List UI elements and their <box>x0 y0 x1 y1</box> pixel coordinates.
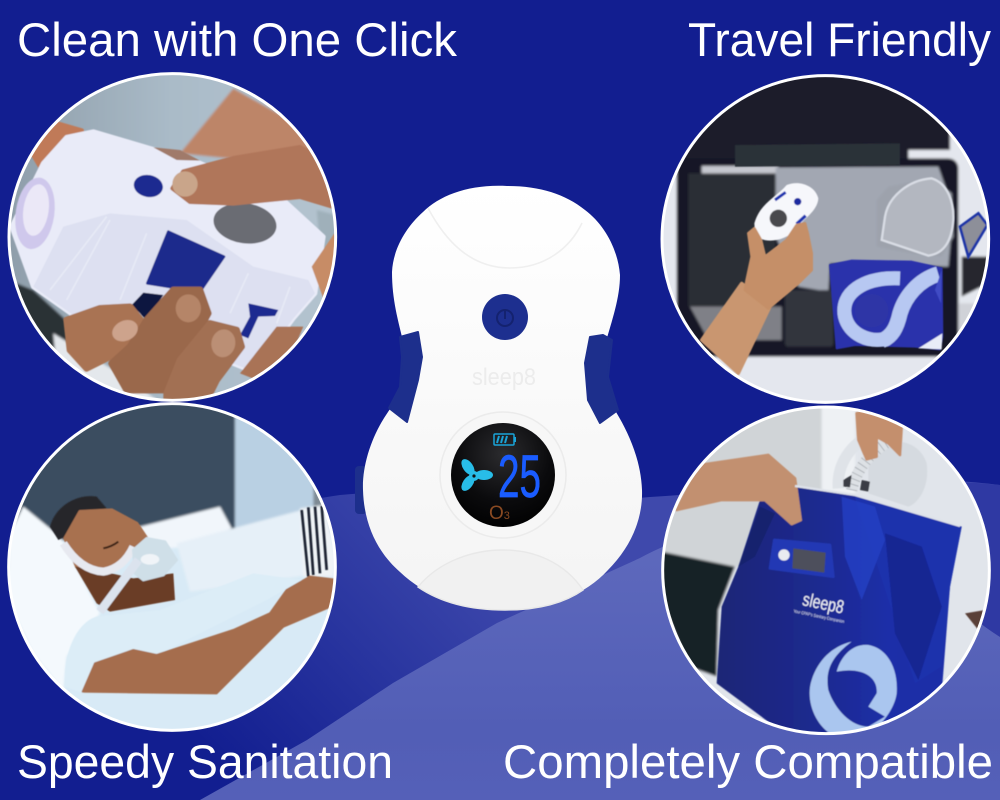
device: display <box>451 423 555 527</box>
device: sleep8 logo: sleep8 <box>472 364 536 391</box>
device: shell <box>363 186 642 610</box>
device: top cap seam <box>428 208 582 268</box>
timer reading: 25 <box>498 443 541 510</box>
icon: battery <box>494 434 516 445</box>
device: right grip <box>585 335 618 423</box>
device: left grip <box>389 332 422 422</box>
central device: sleep8 sanitiser <box>355 186 642 610</box>
heading: Speedy Sanitation: Speedy Sanitation <box>17 735 393 788</box>
photo circle: device in packed suitcase <box>655 70 1000 417</box>
device: power button <box>482 294 528 340</box>
photo circle: finger pressing the device button <box>0 60 347 407</box>
photo circle: man sleeping with CPAP mask <box>0 400 347 747</box>
photo circle: CPAP mask going into blue sanitising bag <box>655 400 1000 747</box>
device: side switch <box>355 466 367 514</box>
photo circle: CPAP mask going into blue sanitising bag: sleep8 <box>801 588 846 618</box>
icon: fan <box>459 457 493 493</box>
photo circle: CPAP mask going into blue sanitising bag: Your CPAP's Sanitary Companion <box>793 608 845 624</box>
device: display bezel <box>440 412 566 538</box>
background wave: middle band <box>0 480 1000 800</box>
background wave: front band <box>200 523 1000 800</box>
device: bottom cap <box>418 550 583 610</box>
heading: Travel Friendly: Travel Friendly <box>688 13 991 66</box>
heading: Completely Compatible: Completely Compatible <box>503 735 993 788</box>
background wave: right-hand band <box>800 481 1000 660</box>
ozone label: O3 <box>489 503 510 524</box>
heading: Clean with One Click: Clean with One Click <box>17 13 458 66</box>
